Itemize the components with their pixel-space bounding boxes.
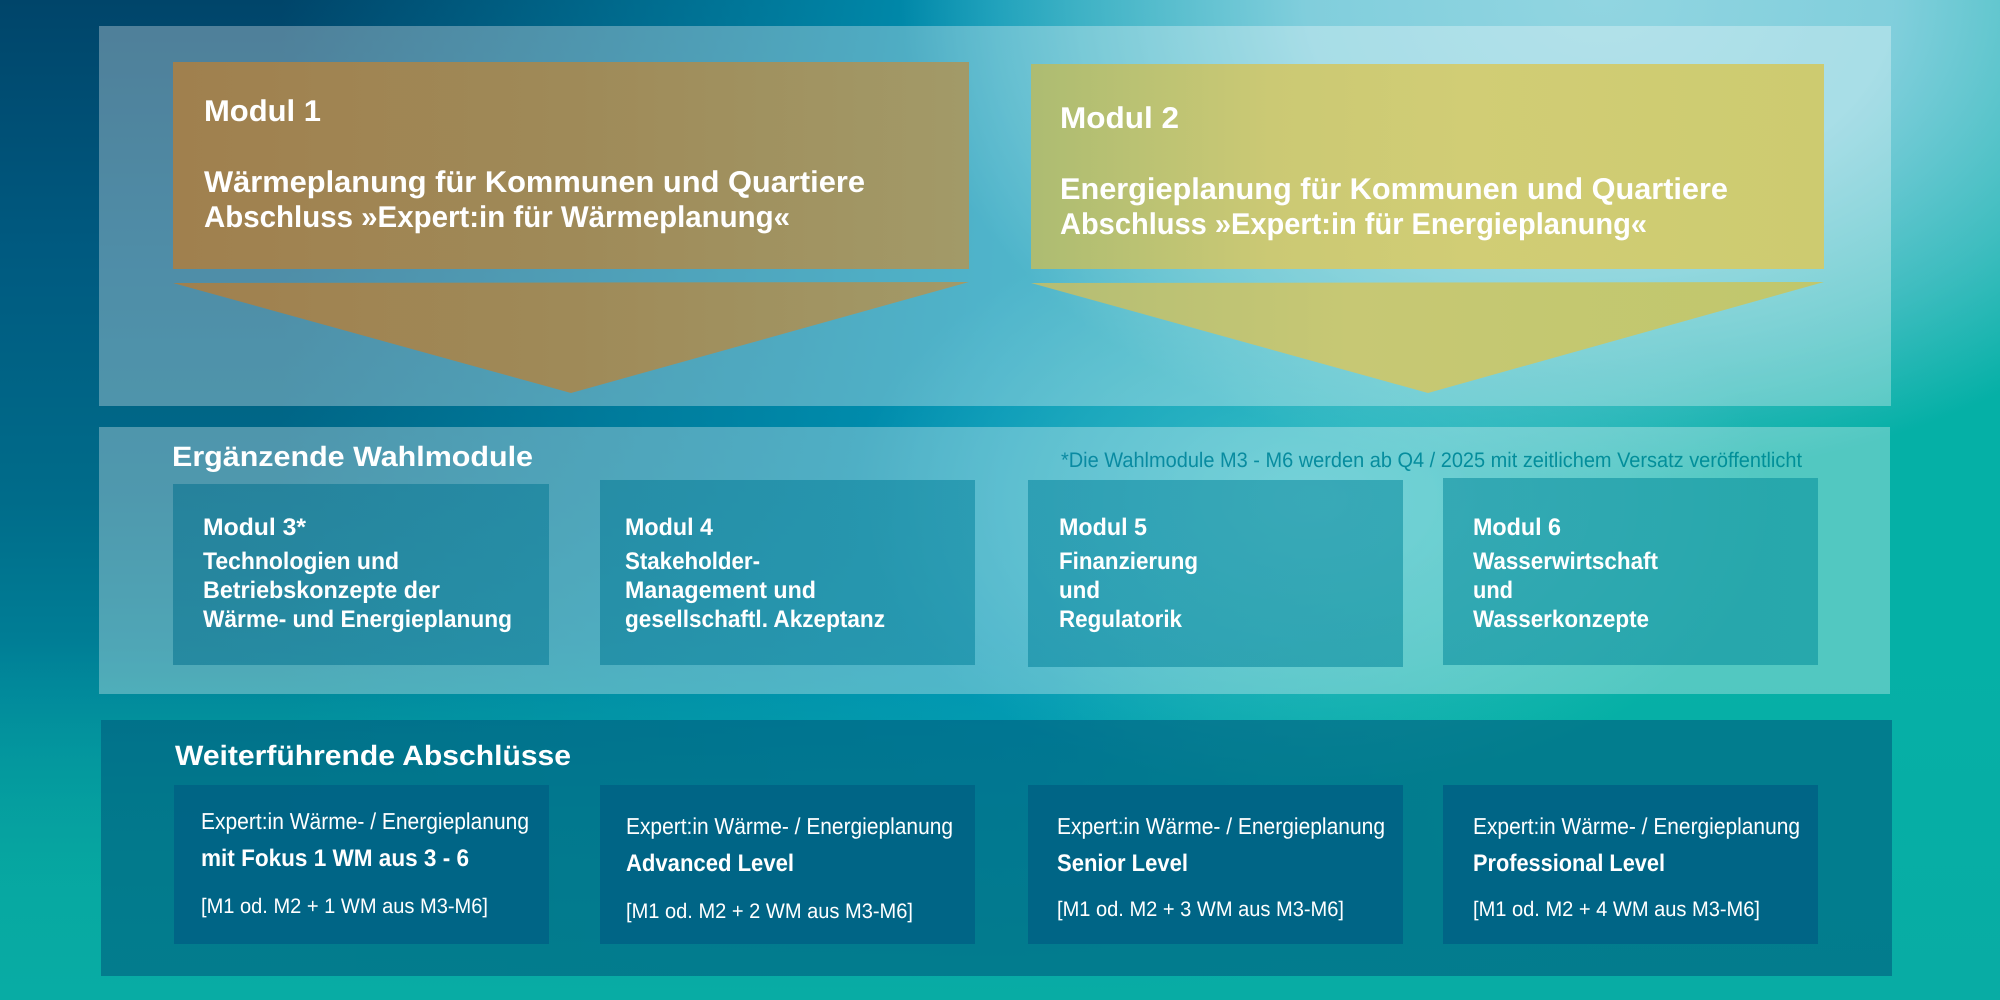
Professional requirements: [M1 od. M2 + 4 WM aus M3-M6] [1473,898,1760,921]
Fokus qualification: Expert:in Wärme- / Energieplanung [201,808,529,834]
Modul 6 description: Wasserkonzepte [1473,606,1649,633]
Modul 4 description [625,548,885,633]
panel: elective modules [99,427,1890,694]
panel: core modules [99,26,1891,406]
footnote: *Die Wahlmodule M3 - M6 werden ab Q4 / 2025 mit zeitlichem Versatz veröffentlicht [1061,449,1802,472]
Professional qualification: Expert:in Wärme- / Energieplanung [1473,813,1800,839]
card: Modul 6 [1443,478,1818,665]
Modul 1 degree: Abschluss »Expert:in für Wärmeplanung« [204,201,790,234]
card: Advanced Level [600,785,975,944]
Modul 2 degree: Abschluss »Expert:in für Energieplanung« [1060,208,1647,241]
arrow: Modul 1 down [173,282,969,393]
Senior level: Senior Level [1057,850,1188,877]
Professional level: Professional Level [1473,850,1665,877]
Advanced qualification: Expert:in Wärme- / Energieplanung [626,813,953,839]
Modul 3 description: Wärme- und Energieplanung [203,606,512,633]
Fokus requirements: [M1 od. M2 + 1 WM aus M3-M6] [201,895,488,918]
Modul 6 description: Wasserwirtschaft [1473,548,1658,575]
Modul 2 title: Energieplanung für Kommunen und Quartiere [1060,173,1728,206]
card: Modul 3 [173,484,549,665]
Modul 6 label: Modul 6 [1473,514,1561,541]
Modul 3 label: Modul 3* [203,514,307,541]
Senior qualification: Expert:in Wärme- / Energieplanung [1057,813,1385,839]
Modul 6 description [1473,548,1658,633]
Modul 6 description: und [1473,577,1513,604]
Fokus level: mit Fokus 1 WM aus 3 - 6 [201,845,469,872]
Modul 5 description: Regulatorik [1059,606,1183,633]
Modul 5 description [1059,548,1198,633]
Senior requirements: [M1 od. M2 + 3 WM aus M3-M6] [1057,898,1344,921]
card: Fokus [174,785,549,944]
arrow: Modul 2 down [1031,282,1824,393]
card: Modul 5 [1028,480,1403,667]
panel: further degrees [101,720,1892,976]
Advanced level: Advanced Level [626,850,794,877]
Modul 1 label: Modul 1 [204,95,321,128]
card: Professional Level [1443,785,1818,944]
card: Modul 4 [600,480,975,665]
Modul 5 description: und [1059,577,1100,604]
Modul 4 label: Modul 4 [625,514,714,541]
Modul 4 description: gesellschaftl. Akzeptanz [625,606,885,633]
Modul 3 description: Betriebskonzepte der [203,577,440,604]
Modul 2 label: Modul 2 [1060,102,1179,135]
Modul 3 description [203,548,512,633]
Modul 5 label: Modul 5 [1059,514,1147,541]
box: Modul 2 [1031,64,1824,269]
Modul 4 description: Management und [625,577,816,604]
Modul 4 description: Stakeholder- [625,548,760,575]
card: Senior Level [1028,785,1403,944]
Modul 1 title: Wärmeplanung für Kommunen und Quartiere [204,166,865,199]
Modul 3 description: Technologien und [203,548,399,575]
Advanced requirements: [M1 od. M2 + 2 WM aus M3-M6] [626,900,913,923]
Modul 5 description: Finanzierung [1059,548,1198,575]
heading: Ergänzende Wahlmodule: Ergänzende Wahlmodule [172,441,533,472]
heading: Weiterführende Abschlüsse: Weiterführende Abschlüsse [175,740,571,771]
box: Modul 1 [173,62,969,269]
